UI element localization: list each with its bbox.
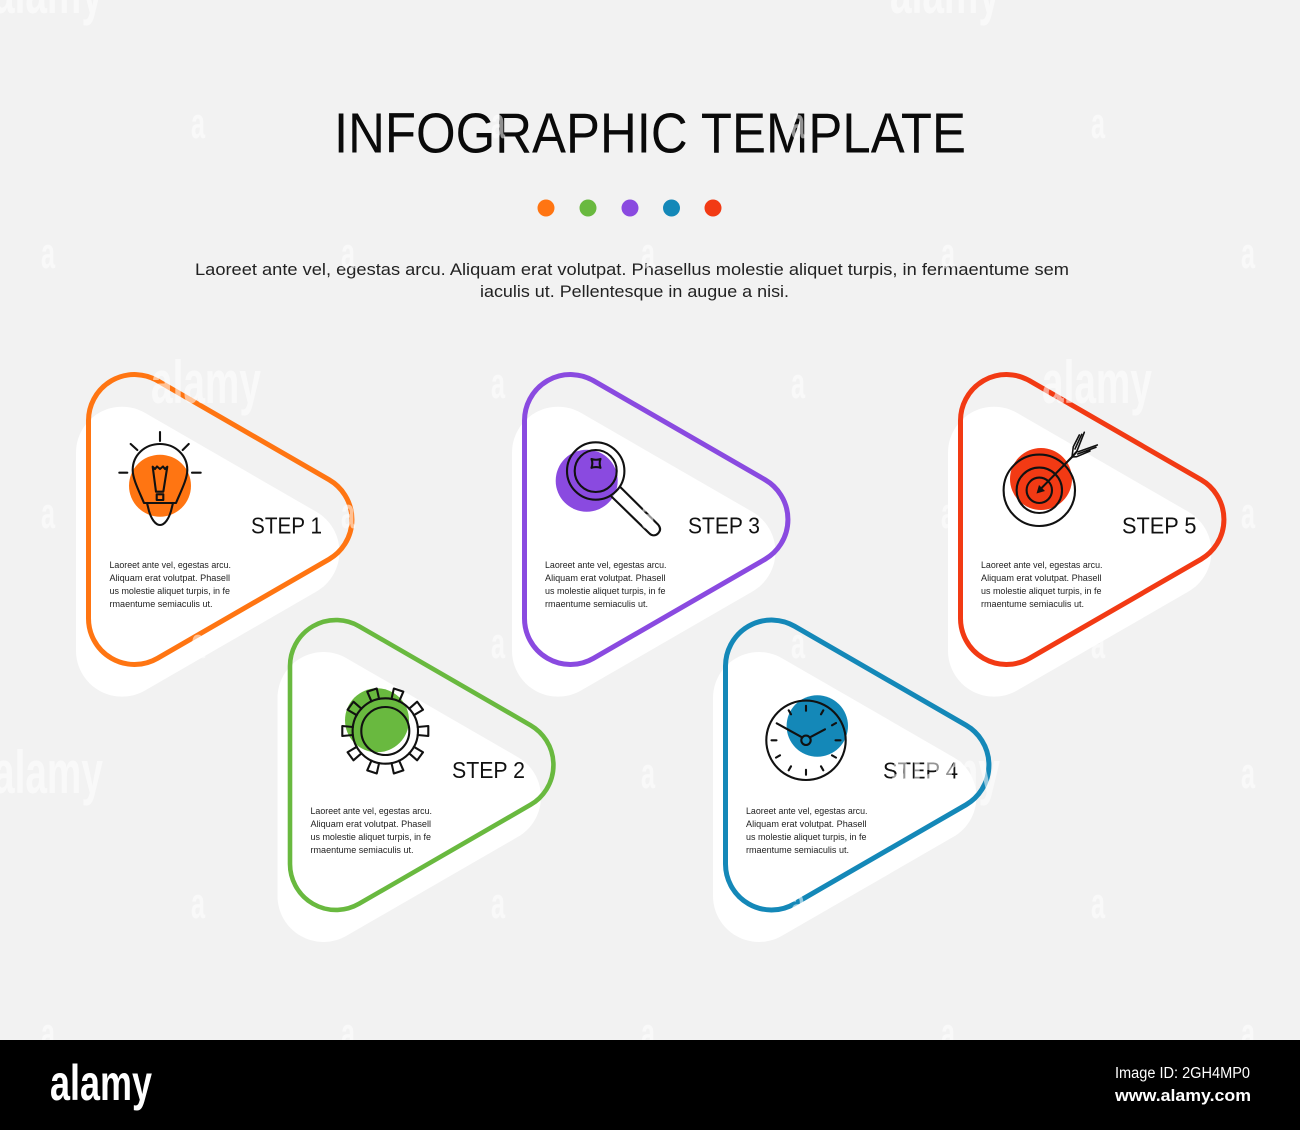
watermark overlay: a — [191, 99, 205, 148]
description text — [981, 560, 1102, 609]
watermark overlay: a — [41, 1009, 55, 1058]
watermark overlay: alamy — [890, 739, 1000, 806]
description text: us molestie aliquet turpis, in fe — [110, 586, 230, 596]
description text: Aliquam erat volutpat. Phasell — [110, 573, 230, 583]
description text — [310, 806, 432, 855]
icon: clock — [766, 695, 848, 780]
icon: gear — [342, 688, 428, 773]
step label: STEP 3 — [688, 512, 760, 538]
icon: target with arrow — [1004, 432, 1097, 526]
watermark overlay: alamy — [151, 349, 261, 416]
step label: STEP 1 — [251, 512, 322, 538]
icon: magnifying glass — [556, 442, 660, 535]
step label: STEP 5 — [1122, 512, 1196, 538]
description text: Aliquam erat volutpat. Phasell — [310, 819, 431, 829]
description text: Aliquam erat volutpat. Phasell — [746, 819, 866, 829]
watermark overlay: a — [1241, 749, 1255, 798]
watermark overlay: a — [191, 879, 205, 928]
watermark overlay: a — [491, 879, 505, 928]
panel: step 1 — [76, 375, 352, 697]
watermark overlay: a — [1091, 99, 1105, 148]
watermark overlay: a — [641, 749, 655, 798]
watermark overlay: alamy — [1042, 349, 1152, 416]
description text: us molestie aliquet turpis, in fe — [746, 832, 866, 842]
description text: Aliquam erat volutpat. Phasell — [981, 573, 1102, 583]
watermark overlay: a — [641, 489, 655, 538]
watermark overlay: a — [491, 359, 505, 408]
description text — [746, 806, 868, 855]
panel: step 3 — [512, 375, 788, 697]
watermark overlay: a — [641, 1009, 655, 1058]
description text: Laoreet ante vel, egestas arcu. — [981, 560, 1102, 570]
watermark overlay: a — [1241, 1009, 1255, 1058]
description text: us molestie aliquet turpis, in fe — [545, 586, 666, 596]
description text: Laoreet ante vel, egestas arcu. — [746, 806, 868, 816]
watermark overlay: a — [1241, 229, 1255, 278]
watermark overlay: a — [341, 489, 355, 538]
description text: rmaentume semiaculis ut. — [746, 845, 849, 855]
description text: rmaentume semiaculis ut. — [545, 599, 648, 609]
watermark overlay: a — [791, 359, 805, 408]
watermark overlay: a — [1241, 489, 1255, 538]
watermark overlay: a — [491, 99, 505, 148]
description text: Laoreet ante vel, egestas arcu. — [545, 560, 666, 570]
watermark overlay: a — [491, 619, 505, 668]
description text: us molestie aliquet turpis, in fe — [981, 586, 1102, 596]
watermark overlay: a — [1091, 619, 1105, 668]
description text: Laoreet ante vel, egestas arcu. — [110, 560, 231, 570]
panel: step 2 — [278, 620, 553, 942]
footer url: www.alamy.com — [1114, 1086, 1251, 1105]
footer logo: alamy — [50, 1055, 152, 1111]
watermark overlay: a — [41, 489, 55, 538]
description text: rmaentume semiaculis ut. — [981, 599, 1084, 609]
watermark overlay: a — [341, 229, 355, 278]
watermark overlay: a — [191, 619, 205, 668]
description text: us molestie aliquet turpis, in fe — [310, 832, 431, 842]
description text: rmaentume semiaculis ut. — [110, 599, 212, 609]
footer bar — [0, 1040, 1300, 1130]
watermark overlay: a — [341, 749, 355, 798]
title: INFOGRAPHIC TEMPLATE — [334, 102, 966, 164]
watermark overlay: a — [341, 1009, 355, 1058]
step label: STEP 2 — [452, 757, 525, 783]
intro text — [195, 260, 1069, 301]
footer image id: Image ID: 2GH4MP0 — [1115, 1065, 1250, 1082]
watermark overlay: a — [791, 879, 805, 928]
description text: rmaentume semiaculis ut. — [310, 845, 414, 855]
watermark overlay: a — [941, 229, 955, 278]
watermark overlay: a — [791, 619, 805, 668]
icon: light bulb — [119, 432, 201, 525]
description text — [110, 560, 231, 609]
watermark overlay: a — [941, 489, 955, 538]
watermark overlay: a — [641, 229, 655, 278]
intro text: iaculis ut. Pellentesque in augue a nisi. — [480, 282, 789, 301]
watermark overlay: a — [941, 1009, 955, 1058]
step label: STEP 4 — [883, 758, 958, 784]
watermark overlay: a — [791, 99, 805, 148]
watermark overlay: a — [41, 229, 55, 278]
watermark overlay: a — [1091, 879, 1105, 928]
description text — [545, 560, 666, 609]
description text: Laoreet ante vel, egestas arcu. — [310, 806, 432, 816]
colored dots row — [538, 200, 722, 216]
description text: Aliquam erat volutpat. Phasell — [545, 573, 666, 583]
panel: step 5 — [948, 375, 1224, 697]
intro text: Laoreet ante vel, egestas arcu. Aliquam erat volutpat. Phasellus molestie aliquet turpis, in fermaentume sem — [195, 260, 1069, 279]
panel: step 4 — [713, 620, 989, 942]
